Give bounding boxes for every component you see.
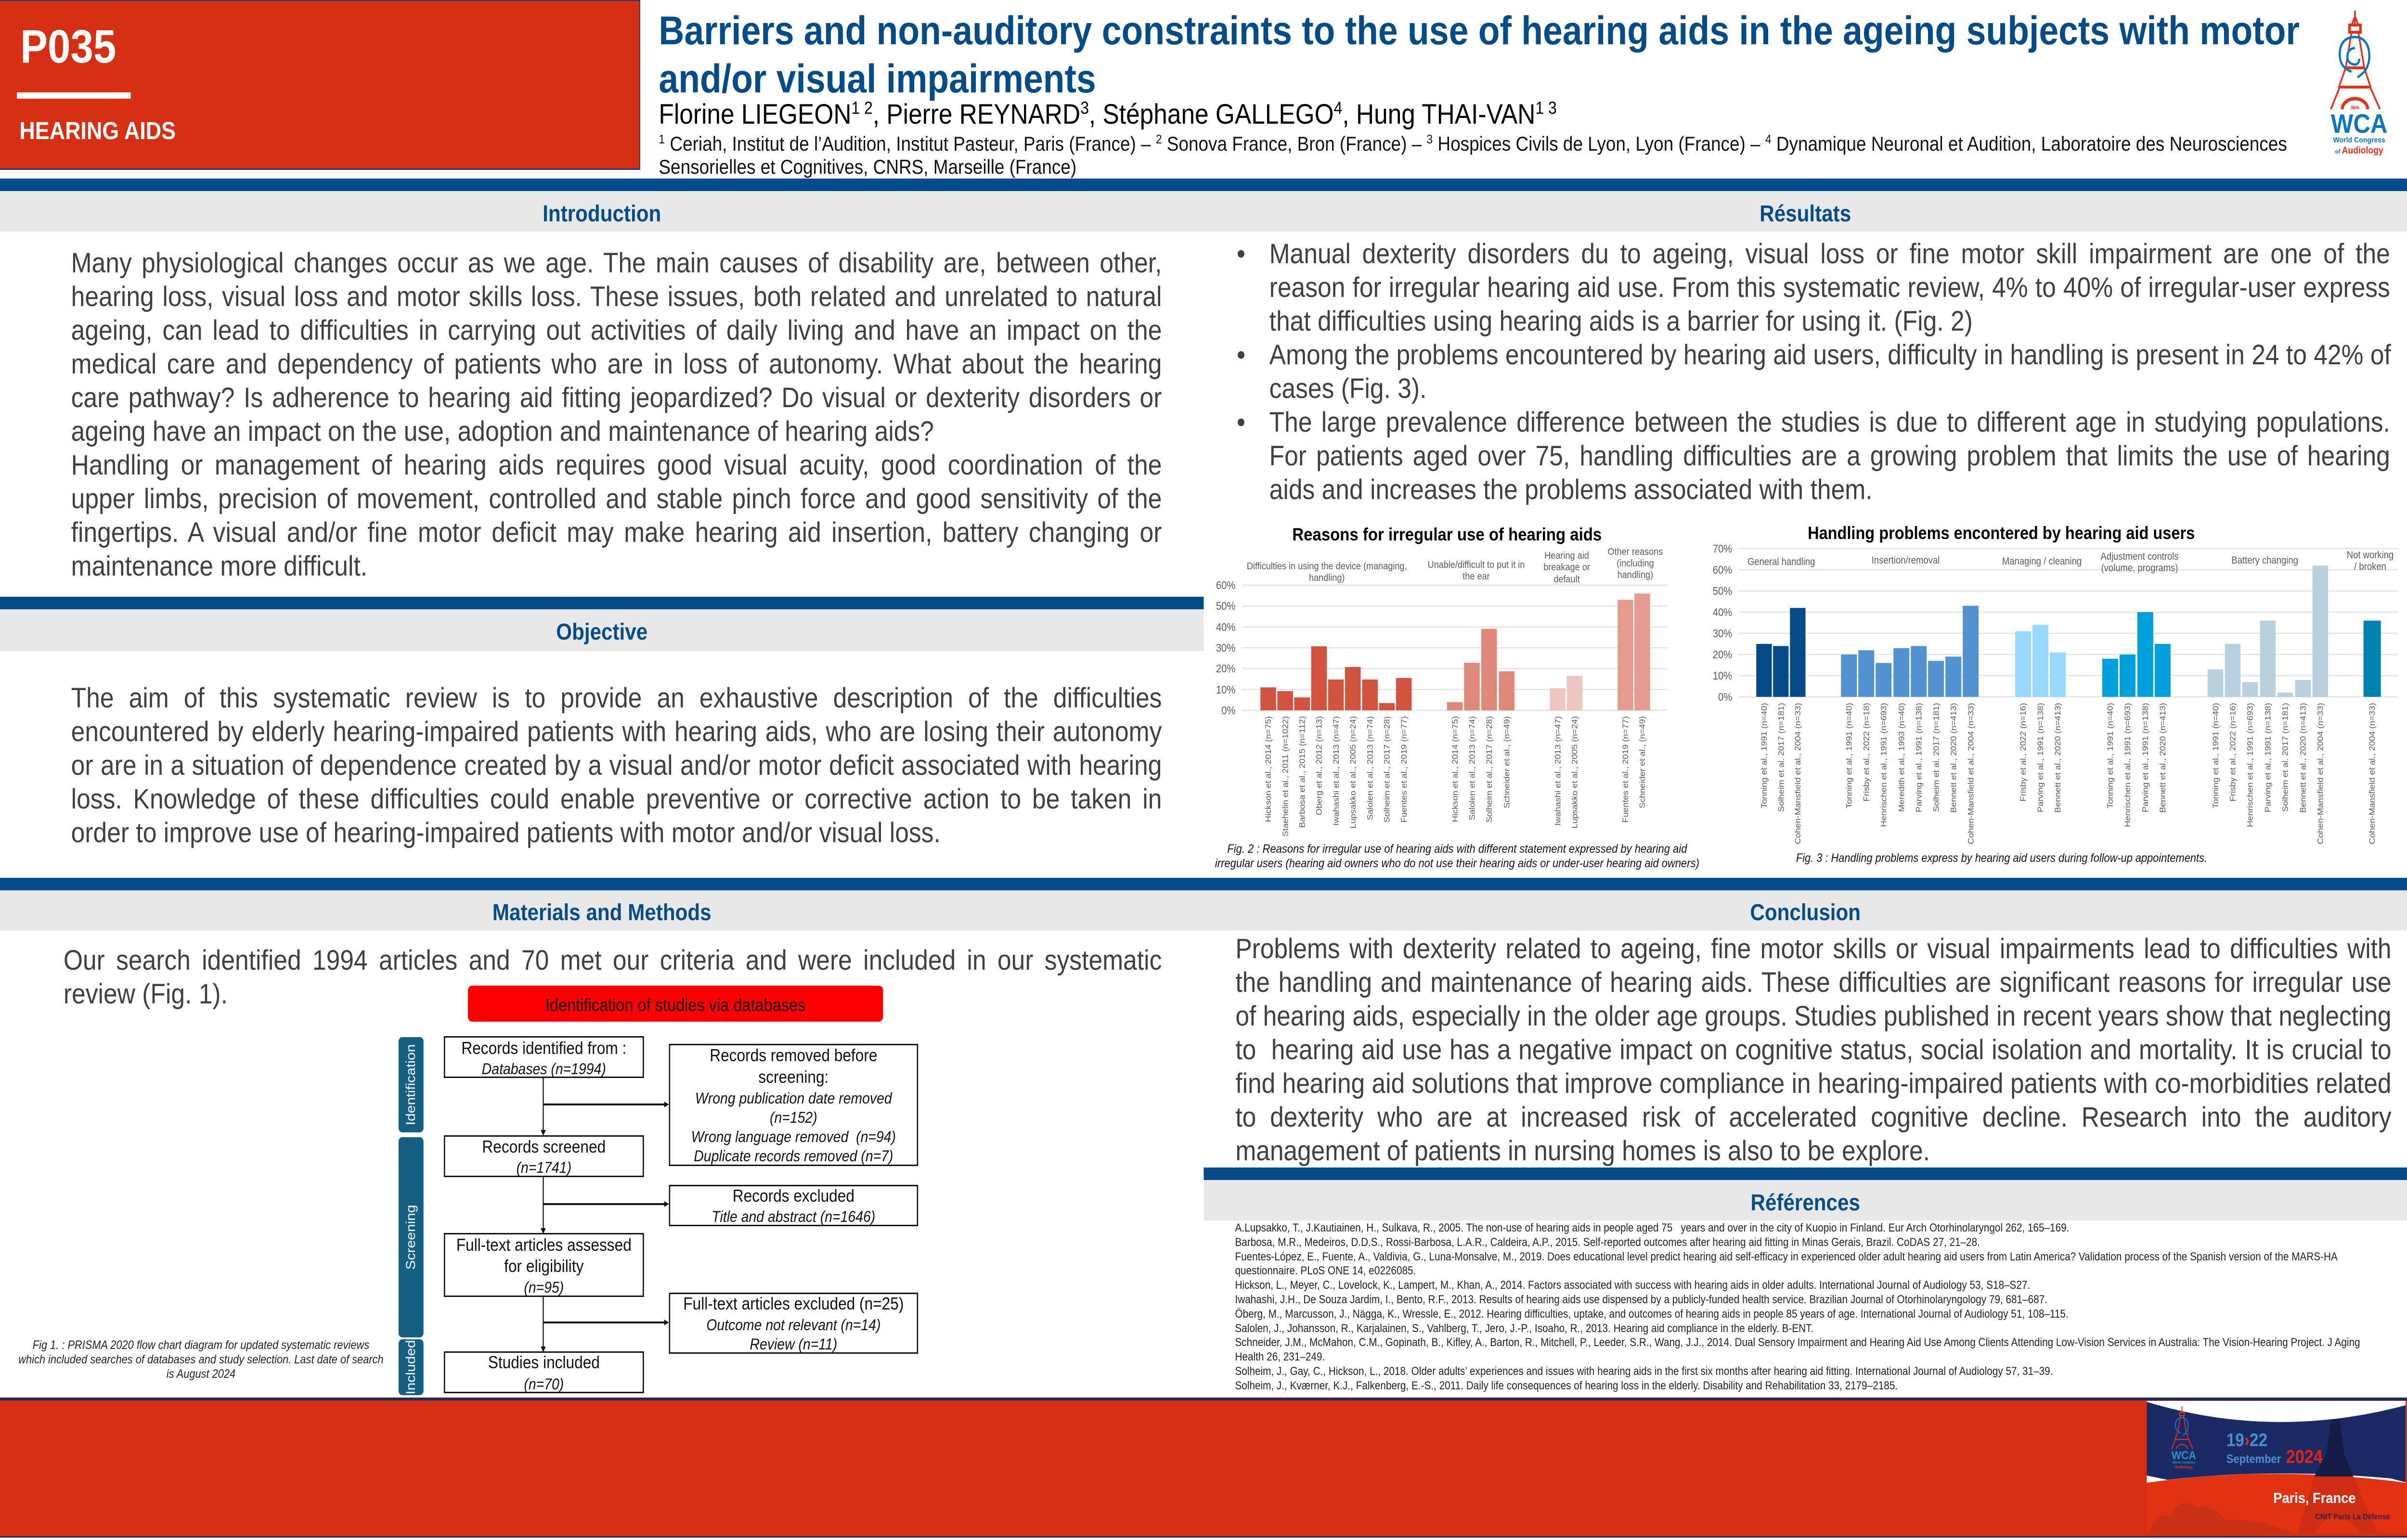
study labels: Tonning et al., 1991 (n=40)	[1845, 703, 1853, 808]
top blue band	[0, 179, 2407, 191]
text block: conclusion: Problems with dexterity related to ageing, fine motor skills or visual impairments lead to difficulties with	[1235, 933, 2391, 964]
bars: difficulties in using the device	[1260, 646, 1411, 710]
heading: Références: Références	[1750, 1190, 1860, 1216]
text block: methods: Our search identified 1994 articles and 70 met our criteria and were included in our systematic	[64, 945, 1162, 976]
bars: managing / cleaning	[2015, 625, 2066, 697]
chart title: Reasons for irregular use of hearing aids	[1292, 524, 1602, 544]
group labels: Not working	[2347, 550, 2394, 561]
group labels: breakage or	[1543, 562, 1590, 573]
y axis labels: 40%	[1713, 606, 1732, 618]
group labels: handling)	[1618, 569, 1653, 580]
text block: results bullets: Manual dexterity disorders du to ageing, visual loss or fine motor skill impairment are one of the	[1269, 238, 2390, 270]
y axis labels: 0%	[1221, 704, 1235, 717]
box: full-text articles assessed: for eligibility	[504, 1256, 583, 1276]
study labels: Frisby et al., 2022 (n=16)	[2228, 703, 2237, 801]
y axis labels: 10%	[1216, 683, 1235, 696]
flow chart banner	[468, 986, 883, 1022]
box: full-text articles excluded: Outcome not relevant (n=14)	[706, 1316, 880, 1334]
box: records screened	[444, 1135, 644, 1177]
y axis labels: 20%	[1713, 648, 1732, 661]
text block: results bullets: The large prevalence difference between the studies is due to different age in studying populations.	[1269, 407, 2390, 438]
topic label: HEARING AIDS	[19, 117, 176, 144]
y axis labels: 30%	[1216, 642, 1235, 654]
box: full-text articles excluded	[669, 1293, 918, 1354]
text block: introduction: Handling or management of hearing aids requires good visual acuity, good coordination of the	[71, 449, 1162, 481]
text block: introduction: ageing have an impact on the use, adoption and maintenance of hearing aids?	[71, 416, 934, 447]
group labels: handling)	[1309, 572, 1345, 583]
y axis labels: 50%	[1713, 585, 1732, 597]
study labels: Salolen et al., 2013 (n=74)	[1467, 716, 1476, 820]
text block: objective: encountered by elderly hearing-impaired patients with hearing aids, who are losing their autonomy	[71, 716, 1162, 747]
study labels: Henrischen et al., 1991 (n=693)	[2246, 703, 2254, 827]
panel: results: •	[1237, 238, 1245, 270]
box: full-text articles assessed: (n=95)	[524, 1279, 564, 1296]
caption: figure 3: Fig. 3 : Handling problems express by hearing aid users during follow-up appointements.	[1796, 852, 2207, 865]
stage bar: included	[399, 1339, 424, 1395]
caption: figure 2: Fig. 2 : Reasons for irregular use of hearing aids with different statement expressed by hearing aid	[1227, 842, 1687, 856]
group labels: Adjustment controls	[2100, 551, 2179, 562]
y axis labels: 60%	[1713, 564, 1732, 576]
box: records excluded	[669, 1185, 918, 1226]
study labels	[1760, 703, 2377, 844]
box: records removed: screening:	[758, 1067, 828, 1087]
caption: figure 1	[11, 1338, 391, 1382]
panel: introduction	[0, 191, 1204, 582]
study labels: Meredith et al., 1993 (n=40)	[1897, 703, 1906, 812]
header panel: poster number	[0, 0, 640, 170]
study labels: Cohen-Mansfield et al., 2004 (n=33)	[2368, 703, 2377, 844]
references list: A.Lupsakko, T., J.Kautiainen, H., Sulkava, R., 2005. The non-use of hearing aids in people aged 75 years and over in the city of Kuopio in Finland. Eur Arch Otorhinolaryngol 262, 165–169.	[1235, 1222, 2069, 1234]
bar chart: reasons for irregular use of hearing aids	[1216, 524, 1668, 837]
text block: conclusion: to hearing aid use has a negative impact on cognitive status, social isolation and mortality. It is crucial to	[1235, 1034, 2391, 1065]
text block: conclusion: to dexterity who are at increased risk of accelerated cognitive decline. Research into the auditory	[1235, 1102, 2391, 1133]
study labels: Bennett et al., 2020 (n=413)	[1949, 703, 1958, 813]
panel: results	[1204, 191, 2407, 505]
box: records removed: Wrong language removed (n=94)	[691, 1128, 896, 1145]
study labels: Iwahashi et al., 2013 (n=47)	[1332, 716, 1340, 825]
references list: Hickson, L., Meyer, C., Lovelock, K., Lampert, M., Khan, A., 2014. Factors associated with success with hearing aids in older adults. International Journal of Audiology 53, S18–S27.	[1235, 1279, 2030, 1292]
box: records excluded: Records excluded	[733, 1186, 854, 1206]
text block: objective	[71, 682, 1162, 848]
bar chart: handling problems	[1713, 523, 2398, 844]
y axis labels	[1216, 579, 1235, 717]
text block: conclusion: of hearing aids, especially in the older age groups. Studies published in recent years show that neglecting	[1235, 1001, 2391, 1032]
box: records removed: (n=152)	[770, 1109, 817, 1126]
study labels: Solheim et al., 2017 (n=28)	[1485, 716, 1493, 822]
text block: conclusion: the handling and maintenance of hearing aids. These difficulties are significant reasons for irregular use	[1235, 967, 2391, 998]
study labels: Solheim et al. 2017 (n=181)	[2281, 703, 2290, 812]
study labels: Parving et al., 1991 (n=138)	[2264, 703, 2272, 812]
text block: objective: order to improve use of hearing-impaired patients with motor and/or visual loss.	[71, 817, 941, 848]
box: studies included: Studies included	[488, 1352, 600, 1372]
text block: introduction: care pathway? Is adherence to hearing aid fitting jeopardized? Do visual or dexterity disorders or	[71, 382, 1162, 413]
icon: small WCA logo: World Congress	[2173, 1461, 2195, 1464]
references list: Health 26, 231–249.	[1235, 1351, 1325, 1363]
icon: small WCA logo	[2172, 1406, 2196, 1469]
study labels: Bennett et al., 2020 (n=413)	[2158, 703, 2167, 813]
heading: Résultats: Résultats	[1760, 201, 1851, 227]
box: full-text articles excluded: Review (n=11)	[750, 1335, 837, 1353]
group labels: General handling	[1747, 556, 1815, 567]
group labels	[1247, 546, 1663, 585]
box: records screened: (n=1741)	[517, 1159, 571, 1176]
affiliations: Sensorielles et Cognitives, CNRS, Marseille (France)	[659, 155, 1076, 178]
footer band	[0, 1398, 2407, 1538]
study labels: Henrischen et al., 1991 (n=693)	[2123, 703, 2132, 827]
box: records screened: Records screened	[482, 1137, 606, 1156]
study labels: Tonning et al., 1991 (n=40)	[2106, 703, 2115, 808]
title: and/or visual impairments	[659, 56, 1096, 101]
box: records identified	[444, 1036, 644, 1078]
icon: small WCA logo: WCA	[2172, 1449, 2196, 1462]
study labels: Solheim et al. 2017 (n=181)	[1776, 703, 1786, 812]
affiliations	[659, 132, 2287, 178]
objective blue band	[0, 597, 1204, 609]
authors: Florine LIEGEON1 2, Pierre REYNARD3, Stéphane GALLEGO4, Hung THAI-VAN1 3	[659, 98, 1557, 130]
bar: not working / broken	[2364, 621, 2381, 697]
heading: Références	[1204, 1180, 2407, 1220]
bars: adjustment controls	[2102, 612, 2171, 697]
text block: results bullets: that difficulties using hearing aids is a barrier for using it. (Fig. 2)	[1269, 306, 1973, 337]
group labels: Hearing aid	[1544, 550, 1589, 561]
text block: introduction	[71, 247, 1162, 582]
tower silhouette	[2315, 1420, 2353, 1476]
panel: objective	[0, 597, 1204, 848]
group labels: the ear	[1462, 571, 1490, 582]
heading: Materials and Methods: Materials and Methods	[492, 900, 712, 925]
box: records removed	[669, 1044, 918, 1166]
study labels: Barbosa et al., 2015 (n=112)	[1298, 716, 1307, 828]
heading: Introduction: Introduction	[543, 201, 661, 227]
box: records excluded: Title and abstract (n=1646)	[712, 1208, 875, 1225]
group labels: default	[1553, 574, 1580, 585]
box: studies included	[444, 1351, 644, 1393]
title: Barriers and non-auditory constraints to the use of hearing aids in the ageing subjects with motor	[659, 8, 2300, 53]
study labels: Solheim et al. 2017 (n=181)	[1931, 703, 1941, 812]
study labels: Parving et al., 1991 (n=138)	[2036, 703, 2045, 812]
group labels: Insertion/removal	[1872, 555, 1940, 566]
text block: results bullets: cases (Fig. 3).	[1269, 373, 1426, 404]
y axis labels: 70%	[1713, 542, 1732, 555]
group labels	[1747, 550, 2394, 574]
caption: figure 2: irregular users (hearing aid owners who do not use their hearing aids or under-user hearing aid owners)	[1215, 857, 1699, 870]
caption: figure 1: is August 2024	[167, 1368, 235, 1381]
heading: Résultats	[1204, 191, 2407, 231]
references list: Solheim, J., Gay, C., Hickson, L., 2018. Older adults’ experiences and issues with hearing aids in the first six months after hearing aid fitting. International Journal of Audiology 57, 31–39.	[1235, 1365, 2053, 1378]
bars: other reasons	[1618, 593, 1650, 710]
bars: insertion/removal	[1841, 606, 1979, 697]
study labels: Solheim et al., 2017 (n=28)	[1383, 716, 1391, 822]
study labels: Iwahashi et al., 2013 (n=47)	[1553, 716, 1562, 825]
text block: introduction: fingertips. A visual and/or fine motor deficit may make hearing aid insertion, battery changing or	[71, 517, 1162, 548]
title	[659, 8, 2300, 101]
study labels: Lupsakko et al., 2005 (n=24)	[1348, 716, 1357, 829]
panel: conclusion	[1204, 890, 2407, 1168]
study labels: Hickson et al., 2014 (n=75)	[1450, 716, 1459, 822]
study labels: Tonning et al., 1991 (n=40)	[1760, 703, 1769, 808]
study labels	[1264, 716, 1647, 837]
text block: objective: The aim of this systematic review is to provide an exhaustive description of the difficulties	[71, 682, 1162, 714]
y axis labels: 20%	[1216, 662, 1235, 675]
caption: figure 1: which included searches of databases and study selection. Last date of search	[18, 1353, 384, 1366]
box: full-text articles assessed: Full-text articles assessed	[456, 1235, 632, 1255]
footer banner: congress details: 2024	[2286, 1447, 2323, 1467]
study labels: Cohen-Mansfield et al., 2004 (n=33)	[1966, 703, 1975, 844]
icon: WCA logo: 36th	[2351, 105, 2359, 111]
heading: Materials and Methods	[0, 890, 1204, 931]
study labels: Staehelin et al., 2011 (n=1022)	[1281, 716, 1290, 837]
white rule	[17, 92, 131, 99]
group labels: Managing / cleaning	[2002, 556, 2082, 567]
references list: questionnaire. PLoS ONE 14, e0226085.	[1235, 1265, 1416, 1277]
bars: battery changing	[2208, 565, 2328, 697]
icon: WCA logo	[2330, 11, 2387, 156]
study labels: Frisby et al., 2022 (n=16)	[2019, 703, 2028, 801]
study labels: Oberg et al., 2012 (n=13)	[1315, 716, 1323, 815]
y axis labels	[1713, 542, 1732, 703]
text block: introduction: hearing loss, visual loss and motor skills loss. These issues, both related and unrelated to natural	[71, 281, 1162, 312]
box: full-text articles excluded: Full-text articles excluded (n=25)	[683, 1294, 904, 1313]
study labels: Salolen et al., 2013 (n=74)	[1366, 716, 1374, 820]
text block: results bullets: aids and increases the problems associated with them.	[1269, 474, 1873, 505]
y axis labels: 0%	[1718, 691, 1732, 703]
text block: results bullets	[1237, 238, 2391, 505]
poster number: P035	[20, 20, 116, 73]
y axis labels: 30%	[1713, 627, 1732, 640]
bars: breakage or default	[1550, 676, 1582, 710]
icon: small WCA logo: Audiology	[2175, 1464, 2193, 1469]
study labels: Tonning et al., 1991 (n=40)	[2211, 703, 2220, 808]
caption: figure 2	[1215, 842, 1699, 870]
icon: WCA logo: World Congress	[2333, 136, 2385, 144]
arrows	[399, 986, 919, 1396]
references list: Fuentes-López, E., Fuente, A., Valdivia, G., Luna-Monsalve, M., 2019. Does educational level predict hearing aid self-efficacy in experienced older adult hearing aid users from Latin America? Validation process of the Spanish version of the MARS-HA	[1235, 1251, 2338, 1263]
box: full-text articles assessed	[444, 1233, 644, 1297]
text block: introduction: medical care and dependency of patients who are in loss of autonomy. What about the hearing	[71, 348, 1162, 380]
text block: conclusion	[1235, 932, 2391, 1168]
group labels: (including	[1617, 558, 1654, 569]
bars: general handling	[1756, 608, 1805, 697]
text block: conclusion: find hearing aid solutions that improve compliance in hearing-impaired patients with co-morbidities related	[1235, 1068, 2391, 1099]
references list: Solheim, J., Kværner, K.J., Falkenberg, E.-S., 2011. Daily life consequences of hearing loss in the elderly. Disability and Rehabilitation 33, 2179–2185.	[1235, 1380, 1898, 1392]
text block: results bullets: For patients aged over 75, handling difficulties are a growing problem that limits the use of hearing	[1269, 440, 2390, 472]
stage bar: included: Included	[404, 1340, 418, 1395]
group labels: Battery changing	[2231, 555, 2298, 566]
text block: objective: or are in a situation of dependence created by a visual and/or motor deficit associated with hearing	[71, 750, 1162, 781]
box: studies included: (n=70)	[524, 1375, 564, 1393]
text block: objective: loss. Knowledge of these difficulties could enable preventive or corrective action to be taken in	[71, 783, 1162, 815]
box: records identified: Records identified from :	[461, 1038, 626, 1058]
study labels: Schneider et al., (n=49)	[1502, 716, 1511, 808]
text block: conclusion: management of patients in nursing homes is also to be explore.	[1235, 1135, 1930, 1167]
box: records identified: Databases (n=1994)	[482, 1060, 606, 1078]
references list	[1235, 1221, 2386, 1394]
y axis labels: 10%	[1713, 669, 1732, 682]
text block: introduction: upper limbs, precision of movement, controlled and stable pinch force and good sensitivity of the	[71, 483, 1162, 514]
affiliations: 1 Ceriah, Institut de l’Audition, Institut Pasteur, Paris (France) – 2 Sonova France, Bron (France) – 3 Hospices Civils de Lyon, Lyon (France) – 4 Dynamique Neuronal et Audition, Laboratoire des Neurosciences	[659, 132, 2287, 155]
heading: Objective: Objective	[556, 619, 647, 645]
text block: results bullets: reason for irregular hearing aid use. From this systematic review, 4% to 40% of irregular-user express	[1269, 272, 2390, 303]
study labels: Schneider et al., (n=49)	[1638, 716, 1647, 808]
group labels: (volume, programs)	[2101, 563, 2178, 574]
study labels: Cohen-Mansfield et al., 2004 (n=33)	[1793, 703, 1802, 844]
text block: introduction: maintenance more difficult.	[71, 551, 367, 582]
references list: Schneider, J.M., McMahon, C.M., Gopinath, B., Kifley, A., Barton, R., Mitchell, P., Leeder, S.R., Wang, J.J., 2014. Dual Sensory Impairment and Hearing Aid Use Among Clients Attending Low-Vision Services in Australia: The Vision-Hearing Project. J Aging	[1235, 1336, 2360, 1349]
study labels: Bennett et al., 2020 (n=413)	[2299, 703, 2307, 813]
group labels: Difficulties in using the device (managing,	[1247, 561, 1407, 572]
event location: Paris, France	[2273, 1489, 2355, 1506]
references list: Salolen, J., Johansson, R., Karjalainen, S., Vahlberg, T., Jero, J.-P., Isoaho, R., 2013. Hearing aid compliance in the elderly. B-ENT.	[1235, 1322, 1813, 1335]
panel: materials and methods	[0, 890, 1204, 1398]
icon: WCA logo: of Audiology	[2335, 145, 2383, 156]
footer banner: congress details: September	[2226, 1452, 2281, 1466]
group labels: Other reasons	[1608, 546, 1663, 557]
bars: unable to put it in the ear	[1447, 629, 1514, 710]
y axis labels: 50%	[1216, 600, 1235, 612]
text block: methods: review (Fig. 1).	[64, 978, 228, 1010]
references blue band	[1204, 1168, 2407, 1180]
heading: Conclusion: Conclusion	[1750, 900, 1861, 925]
stage bar: identification	[399, 1037, 424, 1132]
stage bar: screening	[399, 1137, 424, 1337]
study labels: Fuentes et al., 2019 (n=77)	[1399, 716, 1408, 822]
caption: figure 1: Fig 1. : PRISMA 2020 flow chart diagram for updated systematic reviews	[33, 1339, 369, 1352]
references list: Barbosa, M.R., Medeiros, D.D.S., Rossi-Barbosa, L.A.R., Caldeira, A.P., 2015. Self-reported outcomes after hearing aid fitting in Minas Gerais, Brazil. CoDAS 27, 21–28.	[1235, 1236, 1980, 1249]
study labels: Lupsakko et al., 2005 (n=24)	[1570, 716, 1579, 829]
text block: introduction: ageing, can lead to difficulties in carrying out activities of daily living and have an impact on the	[71, 315, 1162, 346]
box: records removed: Wrong publication date removed	[695, 1090, 892, 1107]
study labels: Parving et al., 1991 (n=138)	[1914, 703, 1923, 812]
footer banner: congress details	[2147, 1401, 2406, 1533]
flow chart banner: Identification of studies via databases	[545, 995, 805, 1015]
text block: introduction: Many physiological changes occur as we age. The main causes of disability are, between other,	[71, 247, 1162, 279]
heading: Conclusion	[1204, 890, 2407, 931]
heading: Objective	[0, 609, 1204, 651]
study labels: Henrischen et al., 1991 (n=693)	[1879, 703, 1888, 827]
chart title: Handling problems encontered by hearing aid users	[1808, 523, 2195, 543]
panel: results: •	[1237, 407, 1245, 438]
text block: results bullets: Among the problems encountered by hearing aid users, difficulty in handling is present in 24 to 42% of	[1269, 339, 2391, 371]
text block: methods	[64, 944, 1162, 1011]
study labels: Bennett et al., 2020 (n=413)	[2053, 703, 2062, 813]
heading: Introduction	[0, 191, 1204, 231]
footer banner: congress details: CNIT Paris La Défense	[2315, 1512, 2390, 1521]
event dates: 19›22	[2226, 1430, 2267, 1450]
panel: results: •	[1237, 339, 1245, 371]
y axis labels: 40%	[1216, 621, 1235, 633]
y axis labels: 60%	[1216, 579, 1235, 591]
study labels: Frisby et al., 2022 (n=18)	[1862, 703, 1871, 801]
stage bar: screening: Screening	[404, 1205, 418, 1270]
group labels: Unable/difficult to put it in	[1427, 559, 1525, 570]
middle full-width blue band	[0, 878, 2407, 890]
references list: Iwahashi, J.H., De Souza Jardim, I., Bento, R.F., 2013. Results of hearing aids use dispensed by a publicly-funded health service. Brazilian Journal of Otorhinolaryngology 79, 681–687.	[1235, 1294, 2047, 1306]
study labels: Parving et al., 1991 (n=138)	[2141, 703, 2150, 812]
flow chart	[399, 986, 919, 1396]
study labels: Fuentes et al., 2019 (n=77)	[1621, 716, 1630, 822]
study labels: Cohen-Mansfield et al., 2004 (n=33)	[2316, 703, 2325, 844]
box: records removed: Duplicate records removed (n=7)	[694, 1147, 893, 1165]
group labels: / broken	[2354, 561, 2386, 572]
study labels: Hickson et al., 2014 (n=75)	[1264, 716, 1273, 822]
references list: Öberg, M., Marcusson, J., Nägga, K., Wressle, E., 2012. Hearing difficulties, uptake, and outcomes of hearing aids in people 85 years of age. International Journal of Audiology 51, 108–115.	[1235, 1308, 2069, 1321]
stage bar: identification: Identification	[404, 1044, 418, 1125]
icon: WCA logo: WCA	[2331, 108, 2387, 139]
box: records removed: Records removed before	[710, 1045, 877, 1065]
